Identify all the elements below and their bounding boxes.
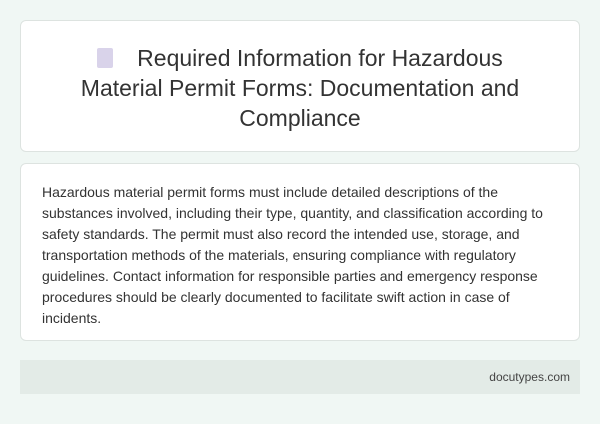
icon: document	[97, 48, 113, 68]
text block: Hazardous material permit forms must include detailed descriptions of the substances involved, including their type, quantity, and classification according to safety standards. The permit must also record the intended use, storage, and transportation methods of the materials, ensuring compliance with regulatory guidelines. Contact information for responsible parties and emergency response procedures should be clearly documented to facilitate swift action in case of incidents.	[42, 184, 543, 326]
panel: description	[20, 163, 580, 341]
title: Required Information for Hazardous Material Permit Forms: Documentation and Compliance	[81, 45, 519, 131]
footer	[20, 360, 580, 394]
panel: title	[20, 20, 580, 152]
footer text: docutypes.com	[489, 370, 570, 384]
